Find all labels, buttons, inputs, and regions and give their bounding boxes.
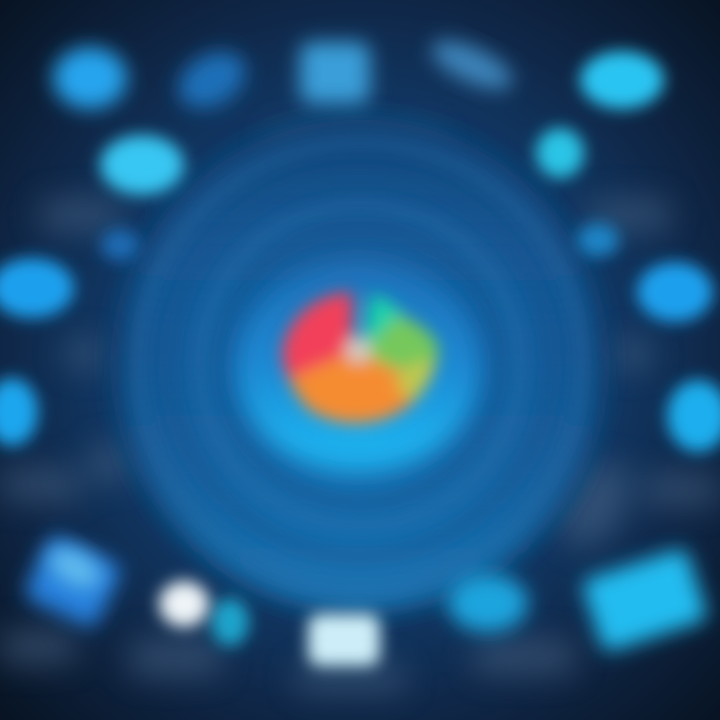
central concentric disc	[102, 107, 618, 623]
bottom row cards	[22, 533, 709, 666]
top row cards	[53, 31, 664, 120]
middle side cards	[0, 258, 720, 452]
pie chart icon	[282, 292, 438, 423]
faint grey labels	[0, 130, 720, 691]
upper side cards	[100, 128, 619, 261]
